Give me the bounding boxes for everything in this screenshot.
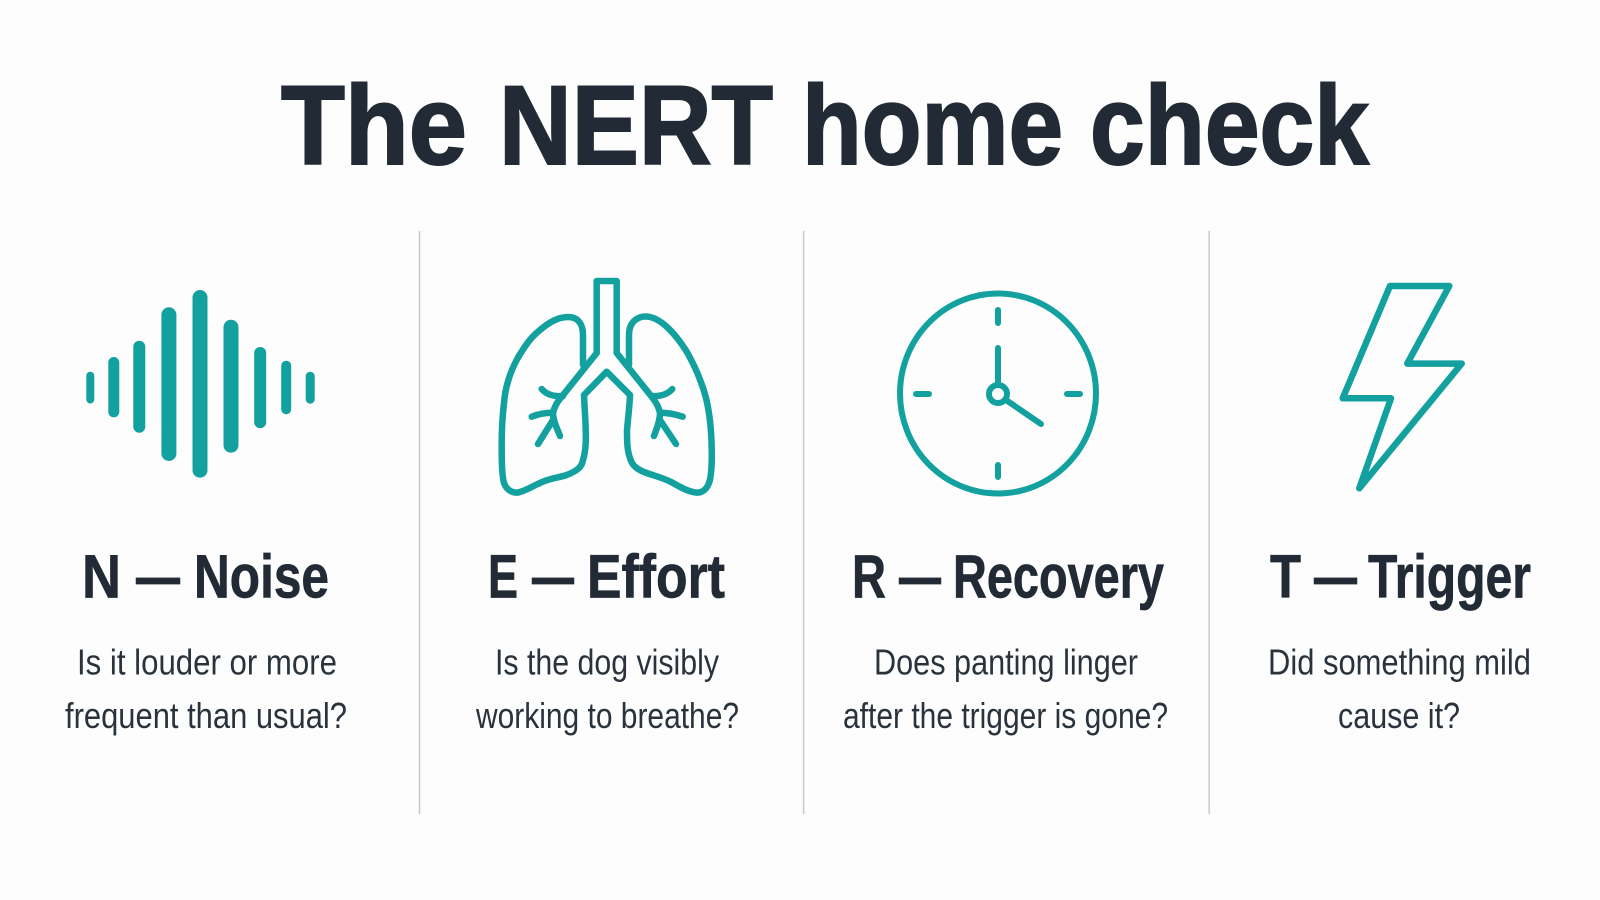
panel: N Noise: [65, 290, 347, 736]
title: home: [802, 63, 1063, 188]
text block: effort question: [475, 642, 739, 736]
text block: noise question: frequent than usual?: [65, 695, 347, 736]
text block: effort question: working to breathe?: [475, 695, 739, 736]
icon: sound wave: [86, 290, 315, 478]
title: check: [1090, 63, 1370, 188]
icon: clock: [900, 294, 1096, 494]
text block: trigger question: Did something mild: [1268, 642, 1531, 682]
heading: E Effort: [488, 542, 725, 610]
heading: N Noise: [82, 542, 329, 610]
heading: E Effort: Effort: [587, 542, 725, 610]
icon: lungs: [502, 281, 712, 493]
heading: T Trigger: Trigger: [1368, 542, 1531, 610]
title: NERT: [499, 63, 773, 188]
title: The: [281, 63, 467, 188]
text block: noise question: [65, 642, 347, 736]
heading: E Effort: E: [488, 542, 518, 610]
heading: N Noise: Noise: [194, 542, 329, 610]
text block: trigger question: cause it?: [1338, 695, 1460, 736]
heading: R Recovery: Recovery: [953, 542, 1164, 610]
icon: lightning bolt: [1343, 286, 1462, 488]
heading: R Recovery: [852, 542, 1164, 610]
heading: R Recovery: —: [899, 542, 941, 610]
heading: T Trigger: [1270, 542, 1531, 610]
text block: noise question: Is it louder or more: [77, 642, 337, 682]
heading: T Trigger: T: [1270, 542, 1301, 610]
panel: E Effort: [475, 281, 739, 736]
panel: T Trigger: [1268, 286, 1531, 736]
text block: recovery question: [843, 642, 1168, 736]
heading: T Trigger: —: [1314, 542, 1357, 610]
text block: effort question: Is the dog visibly: [495, 642, 719, 682]
heading: N Noise: —: [136, 542, 180, 610]
heading: R Recovery: R: [852, 542, 886, 610]
text block: trigger question: [1268, 642, 1531, 736]
heading: E Effort: —: [532, 542, 574, 610]
text block: recovery question: after the trigger is gone?: [843, 695, 1168, 736]
title: [281, 63, 1370, 188]
text block: recovery question: Does panting linger: [874, 642, 1138, 682]
heading: N Noise: N: [82, 542, 121, 610]
panel: R Recovery: [843, 294, 1168, 736]
